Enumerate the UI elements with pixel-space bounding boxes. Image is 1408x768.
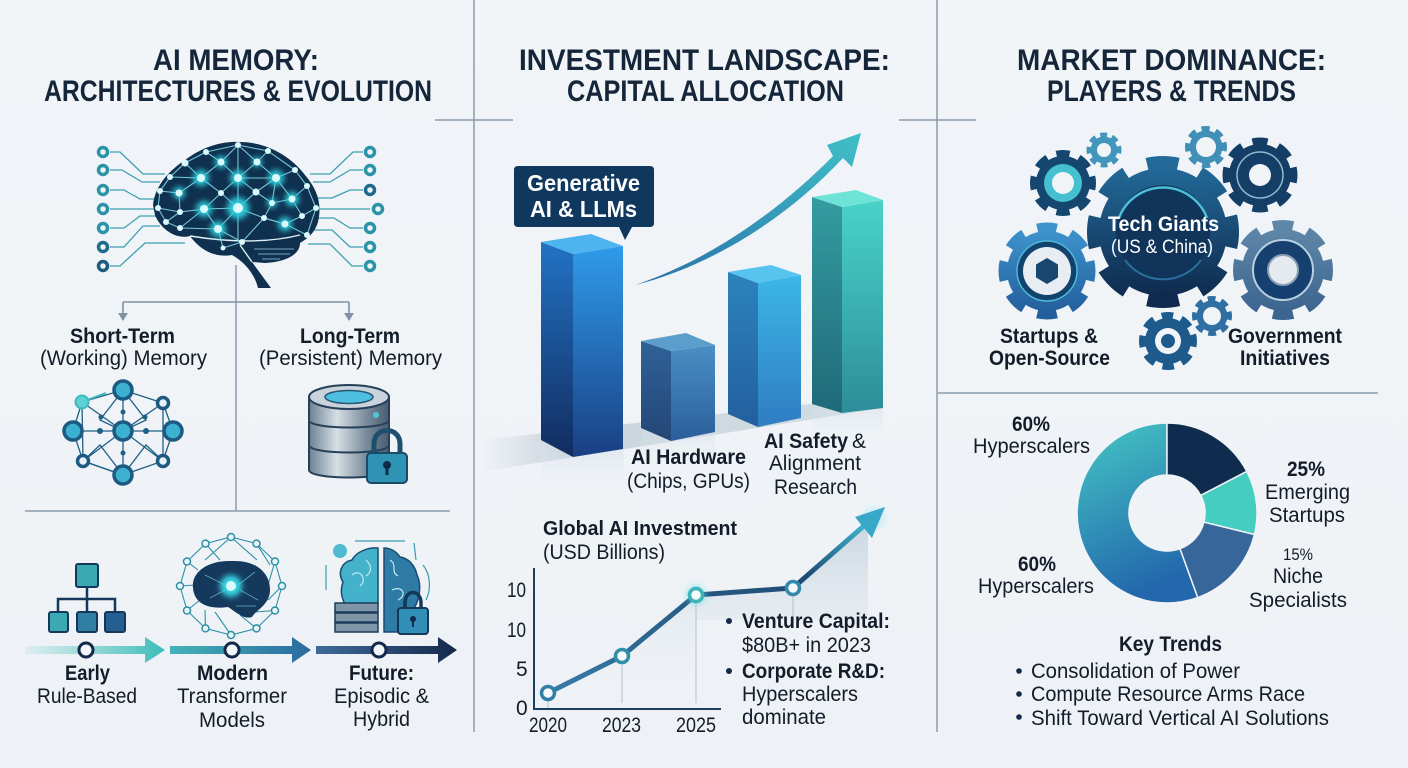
label: future episodic and hybrid: Episodic & — [334, 685, 429, 708]
label: modern transformer models: Transformer — [177, 685, 287, 708]
arrow: growth trend — [635, 133, 861, 285]
label: early rule-based: Early — [65, 662, 110, 685]
label: short-term memory: (Working) Memory — [40, 347, 207, 370]
line chart: global AI investment: 5 — [516, 658, 528, 681]
text block: investment sources: $80B+ in 2023 — [742, 634, 871, 657]
gear: startups — [1005, 229, 1089, 313]
gear: tech giants: Tech Giants — [1108, 213, 1219, 236]
text block: key trends: Consolidation of Power — [1031, 660, 1240, 683]
label: long-term memory: (Persistent) Memory — [259, 347, 442, 370]
arrow: early stage — [25, 637, 165, 663]
title: market dominance: MARKET DOMINANCE: — [1017, 44, 1326, 77]
label: future episodic and hybrid: Future: — [349, 662, 414, 685]
bar chart: capital allocation — [480, 190, 883, 500]
label: long-term memory — [259, 325, 442, 370]
title: investment landscape: CAPITAL ALLOCATION — [567, 75, 844, 108]
title: market dominance — [1017, 44, 1326, 108]
label: 15% niche specialists — [1249, 545, 1347, 612]
line chart: global AI investment: 10 — [507, 579, 526, 602]
label: modern transformer models: Models — [199, 709, 265, 732]
line chart: global AI investment: 2023 — [602, 714, 641, 737]
bar: generative AI — [541, 234, 623, 457]
icon: circuit brain — [98, 142, 382, 288]
gear: small bottom right — [1196, 300, 1228, 332]
label: 25% emerging startups — [1265, 458, 1350, 527]
label: startups and open-source: Open-Source — [989, 347, 1110, 370]
gear: tech giants: (US & China) — [1111, 237, 1213, 258]
title: AI memory — [44, 44, 432, 108]
gear: small top right — [1189, 130, 1223, 164]
title: investment landscape — [519, 44, 890, 108]
label: 60% hyperscalers top: Hyperscalers — [973, 435, 1090, 458]
text block: investment sources: Hyperscalers — [742, 683, 858, 706]
text block: key trends — [1016, 633, 1329, 730]
text block: investment sources: dominate — [742, 706, 826, 729]
text block: key trends: Shift Toward Vertical AI Solutions — [1031, 707, 1329, 730]
donut chart: market share — [1077, 423, 1257, 603]
callout: generative AI and LLMs: AI & LLMs — [530, 196, 637, 222]
line chart: global AI investment: 0 — [516, 697, 528, 720]
bar: AI hardware — [641, 333, 715, 441]
label: short-term memory: Short-Term — [70, 325, 175, 348]
label: AI safety and alignment research — [764, 430, 866, 499]
label: early rule-based — [37, 662, 137, 708]
gear: government — [1240, 227, 1326, 313]
label: future episodic and hybrid — [334, 662, 429, 731]
line chart: global AI investment — [507, 506, 886, 737]
label: short-term memory — [40, 325, 207, 370]
arrows: memory branches — [118, 302, 354, 321]
label: 60% hyperscalers bottom: 60% — [1018, 553, 1056, 576]
text block: investment sources: Corporate R&D: — [742, 660, 885, 683]
icon: node network — [64, 381, 182, 484]
bar: AI safety — [812, 190, 883, 413]
label: modern transformer models: Modern — [197, 662, 268, 685]
icon: transformer brain network — [176, 534, 286, 638]
label: 15% niche specialists: 15% — [1283, 545, 1313, 564]
line chart: global AI investment: 2020 — [529, 714, 567, 737]
label: 60% hyperscalers bottom: Hyperscalers — [978, 575, 1094, 598]
title: AI memory: AI MEMORY: — [153, 44, 319, 77]
label: startups and open-source — [989, 325, 1110, 370]
label: modern transformer models — [177, 662, 287, 732]
label: 25% emerging startups: Emerging — [1265, 481, 1350, 504]
heading: global AI investment: (USD Billions) — [543, 541, 665, 564]
label: 60% hyperscalers top — [973, 413, 1090, 458]
label: AI hardware: AI Hardware — [631, 446, 746, 469]
label: AI safety and alignment research: AI Safety — [764, 430, 848, 453]
label: 25% emerging startups: Startups — [1269, 504, 1345, 527]
label: long-term memory: Long-Term — [300, 325, 400, 348]
text block: key trends: Compute Resource Arms Race — [1031, 683, 1305, 706]
gear: small top left — [1090, 136, 1118, 164]
icon: database with lock — [309, 385, 407, 483]
label: AI hardware — [627, 446, 750, 493]
gear: upper left — [1035, 155, 1091, 211]
arrow: future stage — [316, 637, 457, 663]
label: AI safety and alignment research: Research — [774, 476, 857, 499]
arrow: modern stage — [170, 637, 311, 663]
label: AI safety and alignment research: Alignment — [769, 452, 861, 475]
callout: generative AI and LLMs: Generative — [527, 170, 640, 196]
label: AI safety and alignment research: & — [852, 430, 866, 453]
title: AI memory: ARCHITECTURES & EVOLUTION — [44, 75, 432, 108]
line chart: global AI investment: 2025 — [676, 714, 716, 737]
icon: rule-based hierarchy — [49, 564, 125, 632]
heading: global AI investment — [543, 518, 737, 564]
gear: bottom — [1144, 317, 1192, 365]
label: AI hardware: (Chips, GPUs) — [627, 470, 750, 493]
label: government initiatives — [1228, 325, 1342, 370]
text block: key trends: Key Trends — [1119, 633, 1222, 656]
title: market dominance: PLAYERS & TRENDS — [1047, 75, 1296, 108]
label: government initiatives: Government — [1228, 325, 1342, 348]
line chart: global AI investment: 10 — [507, 619, 526, 642]
title: investment landscape: INVESTMENT LANDSCAPE: — [519, 44, 890, 77]
bar: cloud infrastructure — [728, 265, 801, 427]
label: 25% emerging startups: 25% — [1287, 458, 1325, 481]
label: 60% hyperscalers bottom — [978, 553, 1094, 598]
label: 15% niche specialists: Specialists — [1249, 589, 1347, 612]
icon: gears cluster — [1005, 130, 1326, 365]
gear: tech giants — [1096, 165, 1230, 299]
label: startups and open-source: Startups & — [1000, 325, 1098, 348]
label: 60% hyperscalers top: 60% — [1012, 413, 1050, 436]
icon: hybrid future brain — [326, 541, 429, 634]
label: 15% niche specialists: Niche — [1273, 565, 1323, 588]
gear: upper right — [1228, 143, 1292, 207]
text block: investment sources — [726, 610, 890, 729]
text block: investment sources: Venture Capital: — [742, 610, 890, 633]
callout: generative AI and LLMs — [514, 166, 654, 240]
label: government initiatives: Initiatives — [1240, 347, 1330, 370]
label: early rule-based: Rule-Based — [37, 685, 137, 708]
label: future episodic and hybrid: Hybrid — [353, 708, 410, 731]
heading: global AI investment: Global AI Investment — [543, 518, 737, 540]
